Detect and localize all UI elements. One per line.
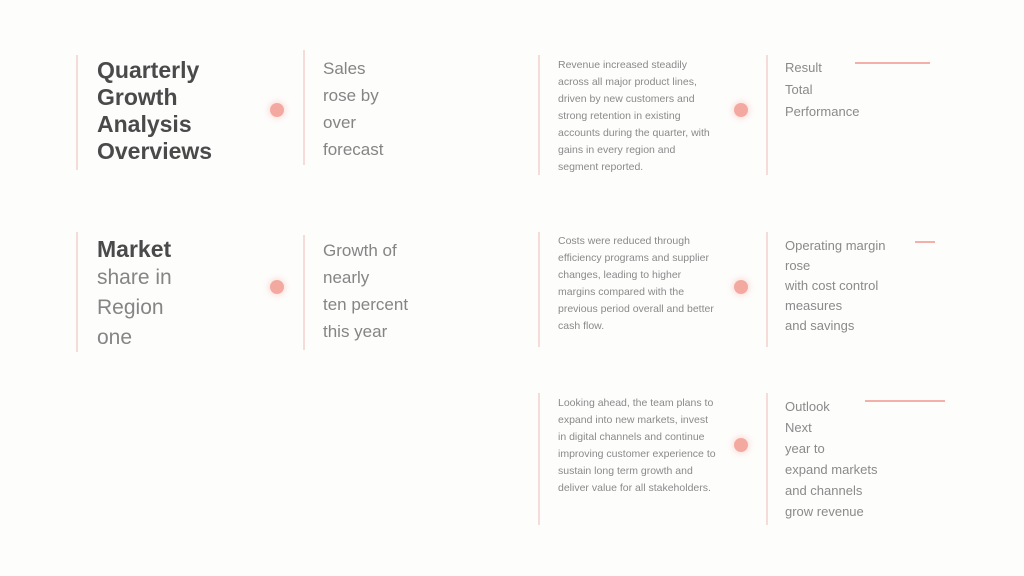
block 2 left: title: share in	[97, 266, 172, 289]
right row 2 label	[766, 232, 935, 347]
block 2 left: title: Region	[97, 296, 164, 319]
right row 1 paragraph: Revenue increased steadily across all major product lines, driven by new customers and strong retention in existing accounts during the quarter, with gains in every region and segment reported.	[558, 59, 710, 173]
block 2 right text: nearly	[323, 268, 369, 287]
block 2 left: title	[76, 232, 172, 352]
block 2 left: title: one	[97, 326, 132, 349]
block 2 right text: ten percent	[323, 295, 408, 314]
right row 2 label: measures	[785, 298, 842, 313]
dot 1	[270, 103, 284, 117]
right row 3 label: expand markets	[785, 462, 878, 477]
right row 2 label: and savings	[785, 318, 854, 333]
dot 3	[734, 103, 748, 117]
block 2 right text: Growth of	[323, 241, 397, 260]
block 1 left: title	[76, 55, 212, 170]
right row 3 label: and channels	[785, 483, 862, 498]
right row 3 paragraph: Looking ahead, the team plans to expand into new markets, invest in digital channels and continue improving customer experience to sustain long term growth and deliver value for all stakeholders.	[558, 397, 716, 494]
block 1 right text: forecast	[323, 140, 383, 159]
right row 1 label: Total	[785, 82, 812, 97]
right row 1 label	[766, 55, 930, 175]
block 1 right text: Sales	[323, 59, 366, 78]
dot 4	[734, 280, 748, 294]
dot 2	[270, 280, 284, 294]
block 1 left: title: Quarterly	[97, 57, 199, 83]
right row 1 label: Result	[785, 60, 822, 75]
right row 1 label: Performance	[785, 104, 859, 119]
right row 2 label: with cost control	[785, 278, 878, 293]
block 1 right text	[303, 50, 384, 165]
block 1 right text: rose by	[323, 86, 379, 105]
block 1 left: title: Overviews	[97, 138, 212, 164]
block 2 right text: this year	[323, 322, 387, 341]
block 1 left: title: Growth	[97, 84, 178, 110]
block 2 left: title: Market	[97, 236, 171, 262]
right row 3 label: grow revenue	[785, 504, 864, 519]
block 1 right text: over	[323, 113, 356, 132]
right row 2 paragraph: Costs were reduced through efficiency programs and supplier changes, leading to higher margins compared with the previous period overall and better cash flow.	[558, 235, 714, 332]
right row 3 label: Outlook	[785, 399, 830, 414]
right row 3 label	[766, 393, 945, 525]
right row 2 label: Operating margin	[785, 238, 885, 253]
block 1 left: title: Analysis	[97, 111, 192, 137]
right row 3 label: Next	[785, 420, 812, 435]
right row 2 label: rose	[785, 258, 810, 273]
block 2 right text	[303, 235, 408, 350]
right row 3 label: year to	[785, 441, 825, 456]
dot 5	[734, 438, 748, 452]
